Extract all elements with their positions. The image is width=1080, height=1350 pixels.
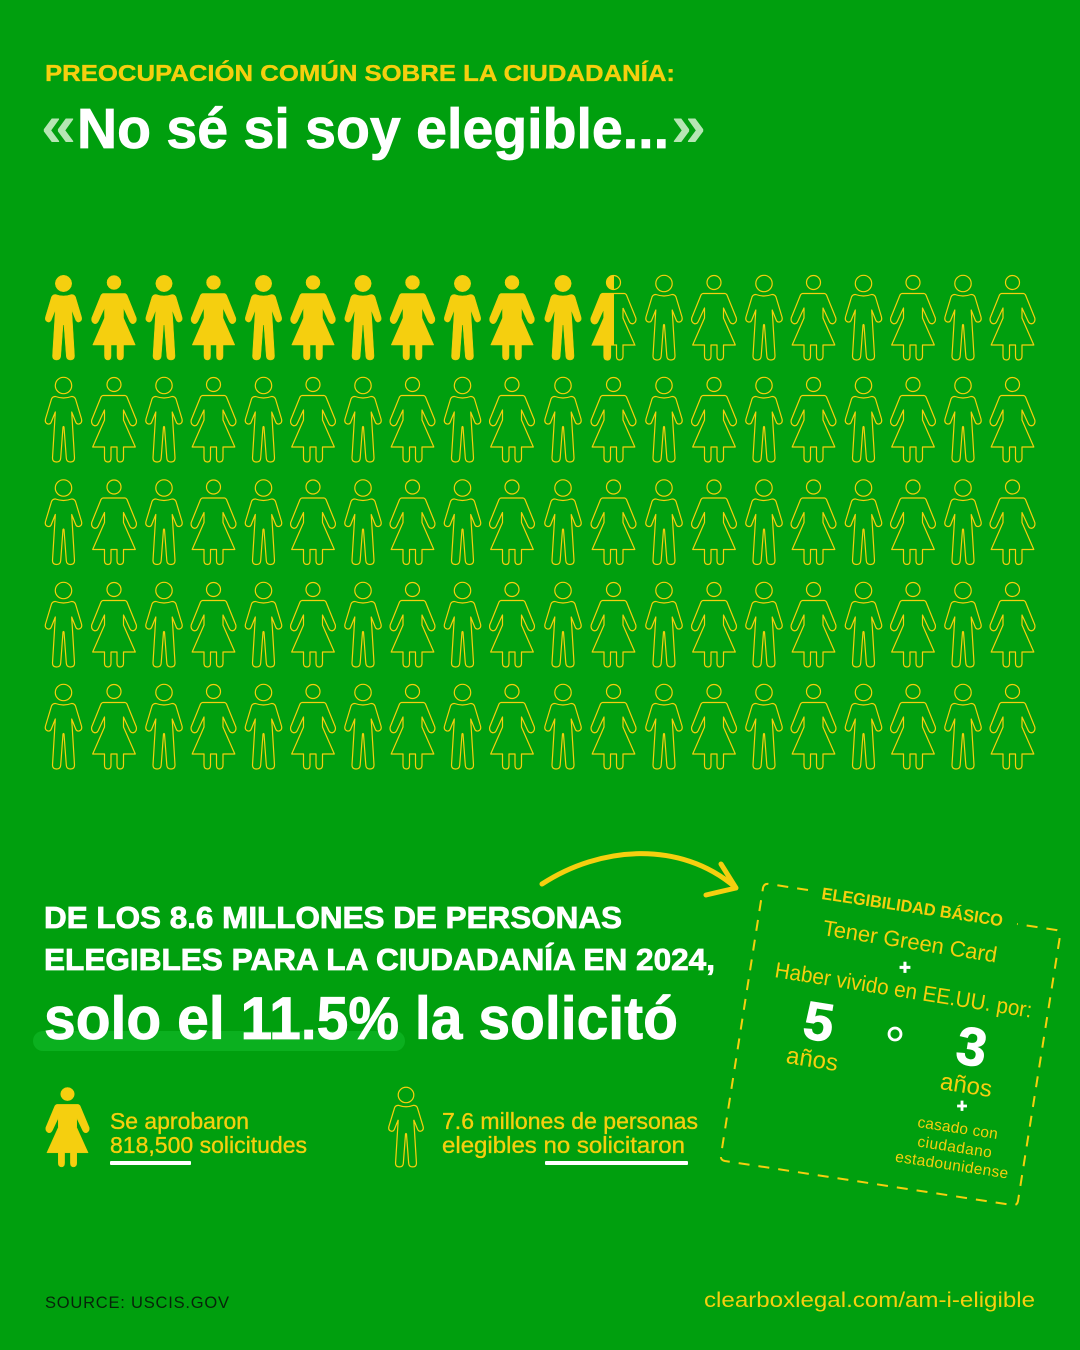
- row 4: [45, 582, 1035, 667]
- row 1: filled figures: [45, 275, 1035, 360]
- line 1: DE LOS 8.6 MILLONES DE PERSONAS: [44, 900, 622, 935]
- closing guillemet: »: [671, 92, 706, 159]
- title quote: [41, 92, 706, 161]
- requirement: green card: Tener Green Card: [821, 915, 999, 967]
- legend text: 7.6 millones de personas: [442, 1108, 698, 1134]
- legend: approved: 818,500 solicitudes: [110, 1132, 307, 1158]
- three years: [938, 1015, 994, 1103]
- or circle: [889, 1028, 901, 1040]
- line 2: ELEGIBLES PARA LA CIUDADANÍA EN 2024,: [44, 942, 715, 977]
- legend: approved: [46, 1087, 307, 1167]
- five years: 5: [799, 990, 838, 1054]
- panel: basic eligibility: [721, 884, 1060, 1205]
- married note: [894, 1114, 1009, 1182]
- icon: outline man: [389, 1087, 423, 1167]
- five years: años: [784, 1042, 840, 1077]
- married note: ciudadano: [916, 1134, 993, 1162]
- row 2: [45, 377, 1035, 462]
- dashed border: [721, 884, 1060, 1205]
- source: SOURCE: USCIS.GOV: [45, 1294, 229, 1312]
- married note: estadounidense: [894, 1149, 1009, 1182]
- plus: +: [899, 957, 911, 979]
- website: clearboxlegal.com/am-i-eligible: [704, 1289, 1035, 1312]
- title text: No sé si soy elegible...: [77, 97, 669, 161]
- highlight bar: [33, 1031, 405, 1051]
- requirement: residence: Haber vivido en EE.UU. por:: [773, 957, 1034, 1023]
- three years: años: [938, 1068, 994, 1103]
- legend: not applied: [389, 1087, 698, 1167]
- opening guillemet: «: [41, 92, 76, 159]
- plus: +: [957, 1096, 967, 1116]
- married note: casado con: [916, 1114, 999, 1143]
- icon: filled woman: [46, 1087, 89, 1167]
- eyebrow heading: PREOCUPACIÓN COMÚN SOBRE LA CIUDADANÍA:: [45, 59, 675, 86]
- row 5: [45, 684, 1035, 769]
- line 3: solo el 11.5% la solicitó: [44, 985, 678, 1052]
- row 3: [45, 480, 1035, 564]
- five years: [784, 990, 840, 1077]
- legend text: Se aprobaron: [110, 1108, 249, 1134]
- legend: not applied: elegibles no solicitaron: [442, 1132, 685, 1158]
- box heading: ELEGIBILIDAD BÁSICO: [820, 884, 1004, 930]
- arrow to eligibility box: [542, 854, 736, 895]
- three years: 3: [952, 1015, 991, 1079]
- pictogram grid: 100 figures, 11.5 filled: [45, 275, 1035, 769]
- statistic heading: [33, 900, 715, 1052]
